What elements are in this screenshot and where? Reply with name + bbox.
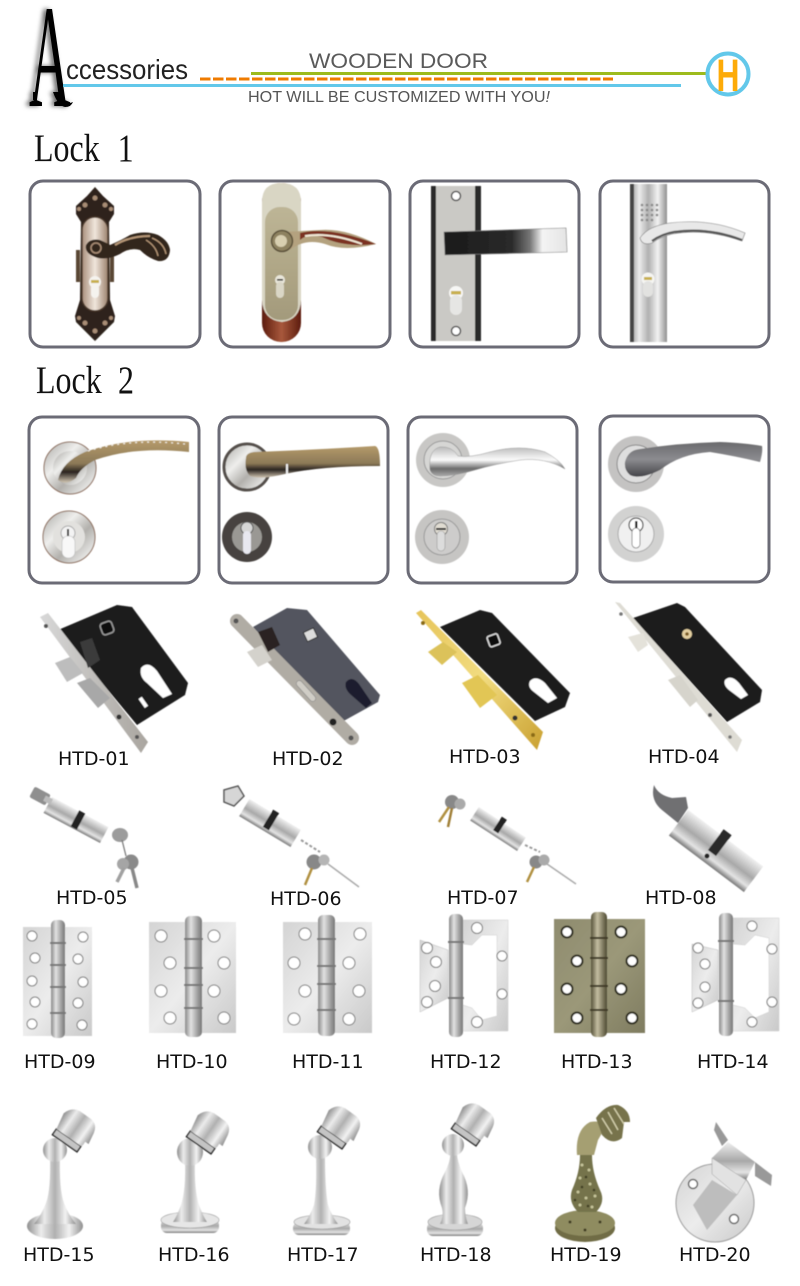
- heading: Lock 2: Lock: [36, 358, 102, 402]
- tagline: HOT WILL BE CUSTOMIZED WITH YOU !: [248, 89, 551, 106]
- orange dashed rule: [200, 78, 613, 80]
- label: HTD-12: [430, 1051, 502, 1073]
- panel: lock 1, black and silver square handle: [410, 181, 579, 347]
- label: HTD-15: [23, 1244, 95, 1266]
- label: HTD-19: [550, 1244, 622, 1266]
- mortise lock HTD-02: [234, 608, 380, 770]
- label: HTD-05: [56, 887, 128, 909]
- header banner: [29, 0, 748, 139]
- hinge HTD-11: [283, 915, 372, 1073]
- label: HTD-13: [561, 1051, 633, 1073]
- blue rule: [63, 84, 681, 87]
- door stopper HTD-15: [23, 1104, 101, 1266]
- panel: lock 1, ornate bronze handle: [30, 181, 200, 347]
- hinge HTD-14: [692, 913, 779, 1073]
- label: HTD-07: [447, 887, 519, 909]
- label: HTD-09: [24, 1051, 96, 1073]
- green rule: [251, 72, 707, 75]
- panel: lock 1, slim plate curved handle: [600, 181, 769, 347]
- panel: lock 2, dark satin lever: [600, 416, 769, 582]
- label: HTD-10: [156, 1051, 228, 1073]
- heading: Lock 1: 1: [118, 126, 134, 170]
- door stopper HTD-17: [287, 1101, 366, 1266]
- hinge HTD-13: [554, 912, 645, 1073]
- label: HTD-14: [697, 1051, 769, 1073]
- door stopper HTD-16: [158, 1106, 235, 1266]
- label: HTD-06: [270, 888, 342, 910]
- cylinder HTD-07: [439, 795, 576, 909]
- panel: lock 2, satin wave lever: [408, 417, 577, 583]
- label: HTD-01: [58, 748, 130, 770]
- panel: lock 1, two-tone plate handle: [220, 181, 390, 347]
- label: HTD-08: [645, 887, 717, 909]
- panel: lock 2, brown lever: [219, 417, 388, 583]
- hinge HTD-09: [23, 920, 96, 1073]
- hinge HTD-10: [149, 916, 236, 1073]
- heading: Lock 2: 2: [118, 358, 134, 402]
- heading: ccessories: ccessories: [66, 54, 188, 85]
- hinge HTD-12: [420, 914, 508, 1073]
- mortise lock HTD-03: [416, 610, 570, 768]
- heading: Lock 1: Lock: [34, 126, 100, 170]
- mortise lock HTD-01: [40, 605, 188, 770]
- label: HTD-11: [292, 1051, 364, 1073]
- door stopper HTD-18: [420, 1098, 500, 1266]
- cylinder HTD-08: [645, 785, 763, 909]
- door stopper HTD-20: [676, 1122, 772, 1266]
- label: HTD-20: [679, 1244, 751, 1266]
- label: HTD-16: [158, 1244, 230, 1266]
- label: HTD-04: [648, 746, 720, 768]
- label: HTD-02: [272, 748, 344, 770]
- label: HTD-18: [420, 1244, 492, 1266]
- door stopper HTD-19: [550, 1105, 630, 1266]
- subtitle: wooden door: WOODEN DOOR: [309, 50, 488, 73]
- cylinder HTD-06: [224, 786, 359, 910]
- label: HTD-17: [287, 1244, 359, 1266]
- mortise lock HTD-04: [615, 602, 762, 768]
- cylinder HTD-05: [29, 786, 139, 909]
- logo: H in circle: H: [716, 50, 740, 101]
- large script letter A: [24, 6, 73, 110]
- panel: lock 2, studded lever: [29, 417, 199, 583]
- label: HTD-03: [449, 746, 521, 768]
